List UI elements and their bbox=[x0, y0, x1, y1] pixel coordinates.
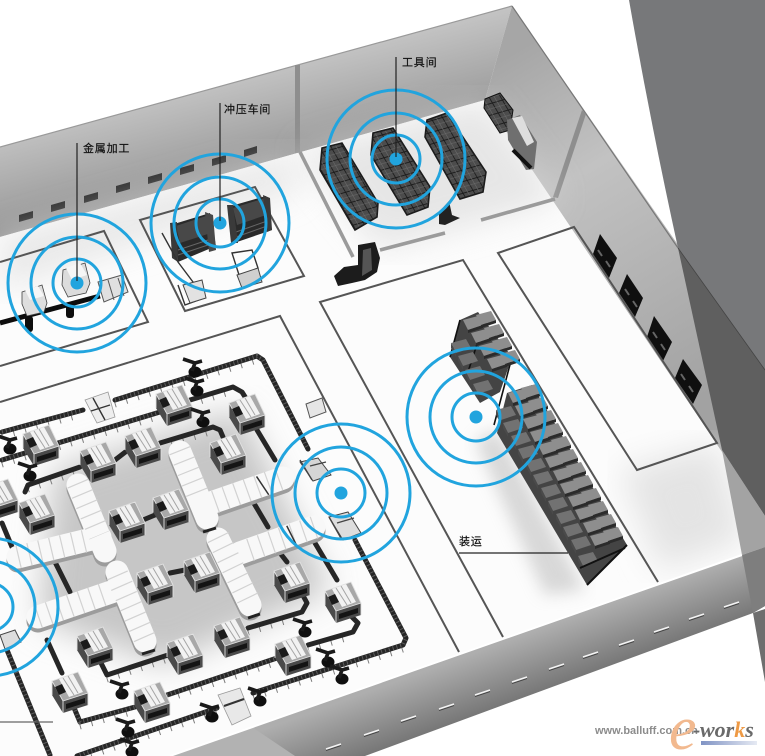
watermark logo dash: - bbox=[693, 717, 700, 742]
stamping presses bbox=[162, 195, 272, 305]
label: metal working: 金属加工 bbox=[83, 141, 130, 155]
back wall bbox=[0, 6, 512, 237]
rack A bbox=[450, 311, 520, 425]
signal rings: left edge bbox=[0, 538, 58, 676]
conveyor belts bbox=[2, 356, 406, 756]
rack B bbox=[496, 384, 627, 585]
watermark logo works: works bbox=[700, 717, 754, 742]
back corner equipment bbox=[484, 93, 537, 170]
watermark bbox=[594, 695, 757, 756]
label: shipping: 装运 bbox=[459, 535, 483, 548]
thick zone lines bbox=[300, 152, 555, 257]
front wall top edge bbox=[170, 547, 765, 756]
tunnel end caps bbox=[142, 528, 260, 654]
watermark url: www.balluff.com.cn bbox=[594, 725, 698, 737]
tool room racks bbox=[320, 113, 486, 230]
right wall bbox=[485, 6, 765, 516]
metal working machines bbox=[0, 263, 128, 332]
floor zone outlines bbox=[0, 187, 717, 652]
zone: stamping bbox=[140, 187, 304, 311]
assembly line conveyors bbox=[2, 356, 406, 756]
zone: shipping bbox=[320, 260, 658, 637]
front wall bbox=[170, 547, 765, 756]
label: stamping shop: 冲压车间 bbox=[224, 102, 271, 116]
signal rings: assembly bbox=[272, 424, 410, 562]
watermark bar bbox=[701, 741, 757, 745]
right wall windows bbox=[593, 234, 702, 404]
zone: assembly bbox=[0, 316, 459, 652]
signal rings: metal working bbox=[8, 214, 146, 352]
tunnel bodies bbox=[18, 452, 314, 641]
back wall top edge bbox=[0, 6, 512, 147]
ribbed white tunnel modules bbox=[18, 450, 316, 654]
conveyor legs bbox=[2, 361, 403, 756]
assembly machines bbox=[0, 385, 361, 723]
soft floor shading bbox=[0, 100, 745, 665]
tunnel ribs bbox=[18, 450, 316, 643]
front wall vents bbox=[326, 602, 739, 749]
signal rings: stamping bbox=[151, 154, 289, 292]
right wall top edge bbox=[512, 6, 678, 248]
shipping racks bbox=[450, 311, 627, 585]
zone: right area bbox=[498, 227, 717, 470]
signal rings: shipping bbox=[407, 348, 545, 486]
tunnel shadows bbox=[18, 456, 314, 645]
signal rings: tool room bbox=[327, 90, 465, 228]
label: tool room: 工具间 bbox=[402, 56, 437, 69]
leader lines bbox=[0, 57, 568, 722]
robot arms bbox=[0, 359, 349, 756]
forklifts bbox=[334, 201, 460, 286]
zone: metal working bbox=[0, 231, 148, 366]
back wall windows bbox=[19, 146, 257, 222]
dark translucent foreground panel bbox=[629, 0, 765, 682]
transfer stations bbox=[0, 392, 361, 725]
conveyor belt texture bbox=[2, 356, 406, 756]
